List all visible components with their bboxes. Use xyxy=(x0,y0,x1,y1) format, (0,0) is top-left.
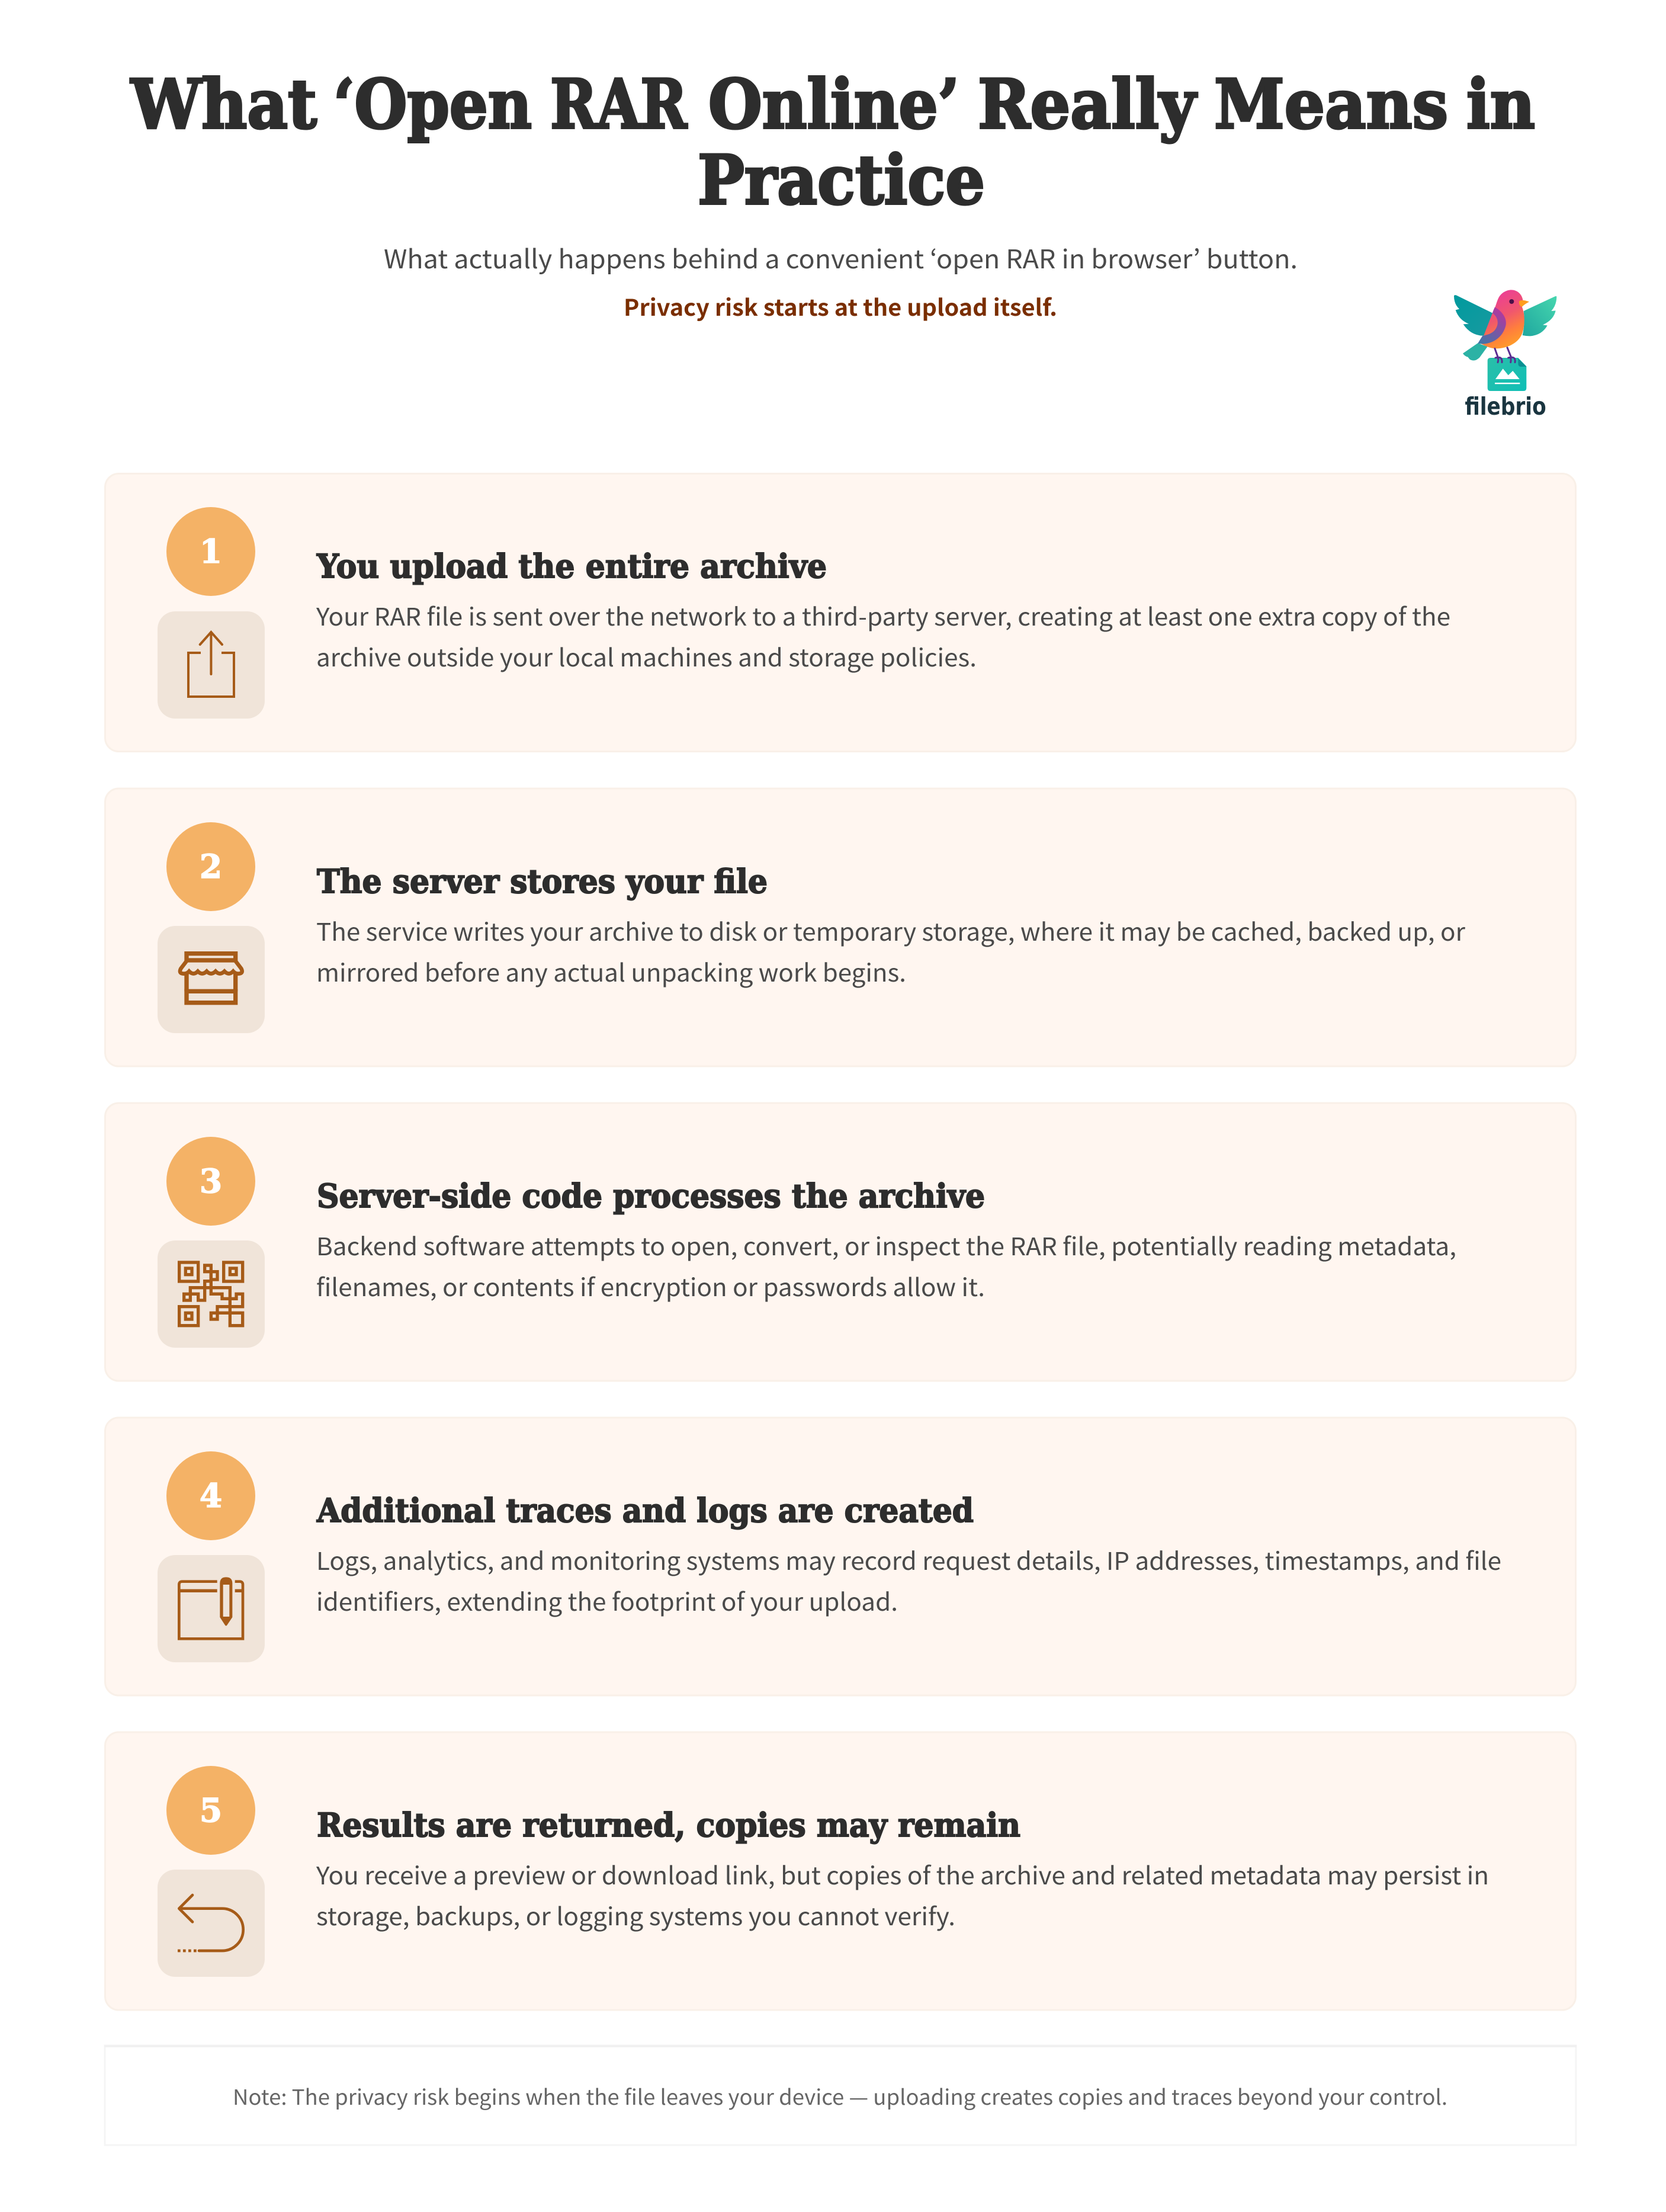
panel: step 4 xyxy=(105,1418,1575,1695)
step number 5 xyxy=(166,1766,255,1855)
description: step 5: storage, backups, or logging systems you cannot verify. xyxy=(316,1897,955,1932)
title: Online’ xyxy=(708,65,959,144)
title: Means xyxy=(1214,65,1448,144)
description: step 3: Backend software attempts to open, convert, or inspect the RAR file, potentially reading metadata, xyxy=(316,1227,1456,1262)
description: step 3 xyxy=(316,1227,1456,1303)
title: What xyxy=(130,65,317,144)
title: ‘Open xyxy=(333,65,532,144)
icon: window with pencil xyxy=(158,1555,265,1662)
logo: filebrio bird xyxy=(1454,290,1556,421)
heading: step 4: Additional traces and logs are created xyxy=(316,1491,974,1530)
description: step 4: Logs, analytics, and monitoring systems may record request details, IP addresses, timestamps, and file xyxy=(316,1541,1501,1577)
panel: step 2 xyxy=(105,788,1575,1066)
title: in xyxy=(1466,65,1535,144)
step number 4 xyxy=(166,1451,255,1540)
footer note: Note: The privacy risk begins when the file leaves your device — uploading creates copies and traces beyond your control. xyxy=(233,2081,1447,2111)
logo: filebrio bird: filebrio xyxy=(1465,392,1546,421)
description: step 3: filenames, or contents if encryption or passwords allow it. xyxy=(316,1268,985,1303)
step number 5: 5 xyxy=(200,1791,222,1829)
heading: step 2: The server stores your file xyxy=(317,862,768,900)
subtitle: What actually happens behind a convenient ‘open RAR in browser’ button. xyxy=(384,239,1298,276)
title: RAR xyxy=(550,65,688,144)
description: step 5: You receive a preview or download link, but copies of the archive and related metadata may persist in xyxy=(316,1856,1489,1892)
heading: step 5: Results are returned, copies may remain xyxy=(317,1806,1020,1844)
description: step 4: identifiers, extending the footprint of your upload. xyxy=(316,1582,898,1618)
description: step 1: archive outside your local machines and storage policies. xyxy=(316,638,977,674)
description: step 1 xyxy=(316,597,1450,674)
step number 4: 4 xyxy=(200,1476,222,1515)
highlighted privacy statement: Privacy risk starts at the upload itself. xyxy=(624,290,1057,323)
panel: step 5 xyxy=(105,1732,1575,2010)
panel: step 1 xyxy=(105,474,1575,751)
description: step 2: mirrored before any actual unpacking work begins. xyxy=(316,953,906,989)
title: Practice xyxy=(698,140,985,220)
step number 1: 1 xyxy=(200,532,222,570)
heading: step 3: Server-side code processes the archive xyxy=(317,1176,985,1215)
description: step 4 xyxy=(316,1541,1501,1618)
icon: store xyxy=(158,926,265,1033)
step number 3: 3 xyxy=(200,1162,222,1200)
footer note xyxy=(104,2045,1577,2145)
description: step 2 xyxy=(316,912,1465,989)
panel: step 3 xyxy=(105,1103,1575,1381)
step number 2: 2 xyxy=(200,847,222,886)
step number 1 xyxy=(166,507,255,596)
step number 3 xyxy=(166,1137,255,1226)
description: step 2: The service writes your archive to disk or temporary storage, where it may be cached, backed up, or xyxy=(316,912,1465,948)
title xyxy=(130,65,1535,220)
icon: upload xyxy=(158,611,265,719)
heading: step 1: You upload the entire archive xyxy=(316,547,827,585)
step number 2 xyxy=(166,822,255,911)
title: Really xyxy=(978,65,1198,144)
description: step 5 xyxy=(316,1856,1489,1932)
description: step 1: Your RAR file is sent over the network to a third-party server, creating at least one extra copy of the xyxy=(316,597,1450,633)
icon: qr code xyxy=(158,1240,265,1348)
icon: return arrow xyxy=(158,1870,265,1977)
